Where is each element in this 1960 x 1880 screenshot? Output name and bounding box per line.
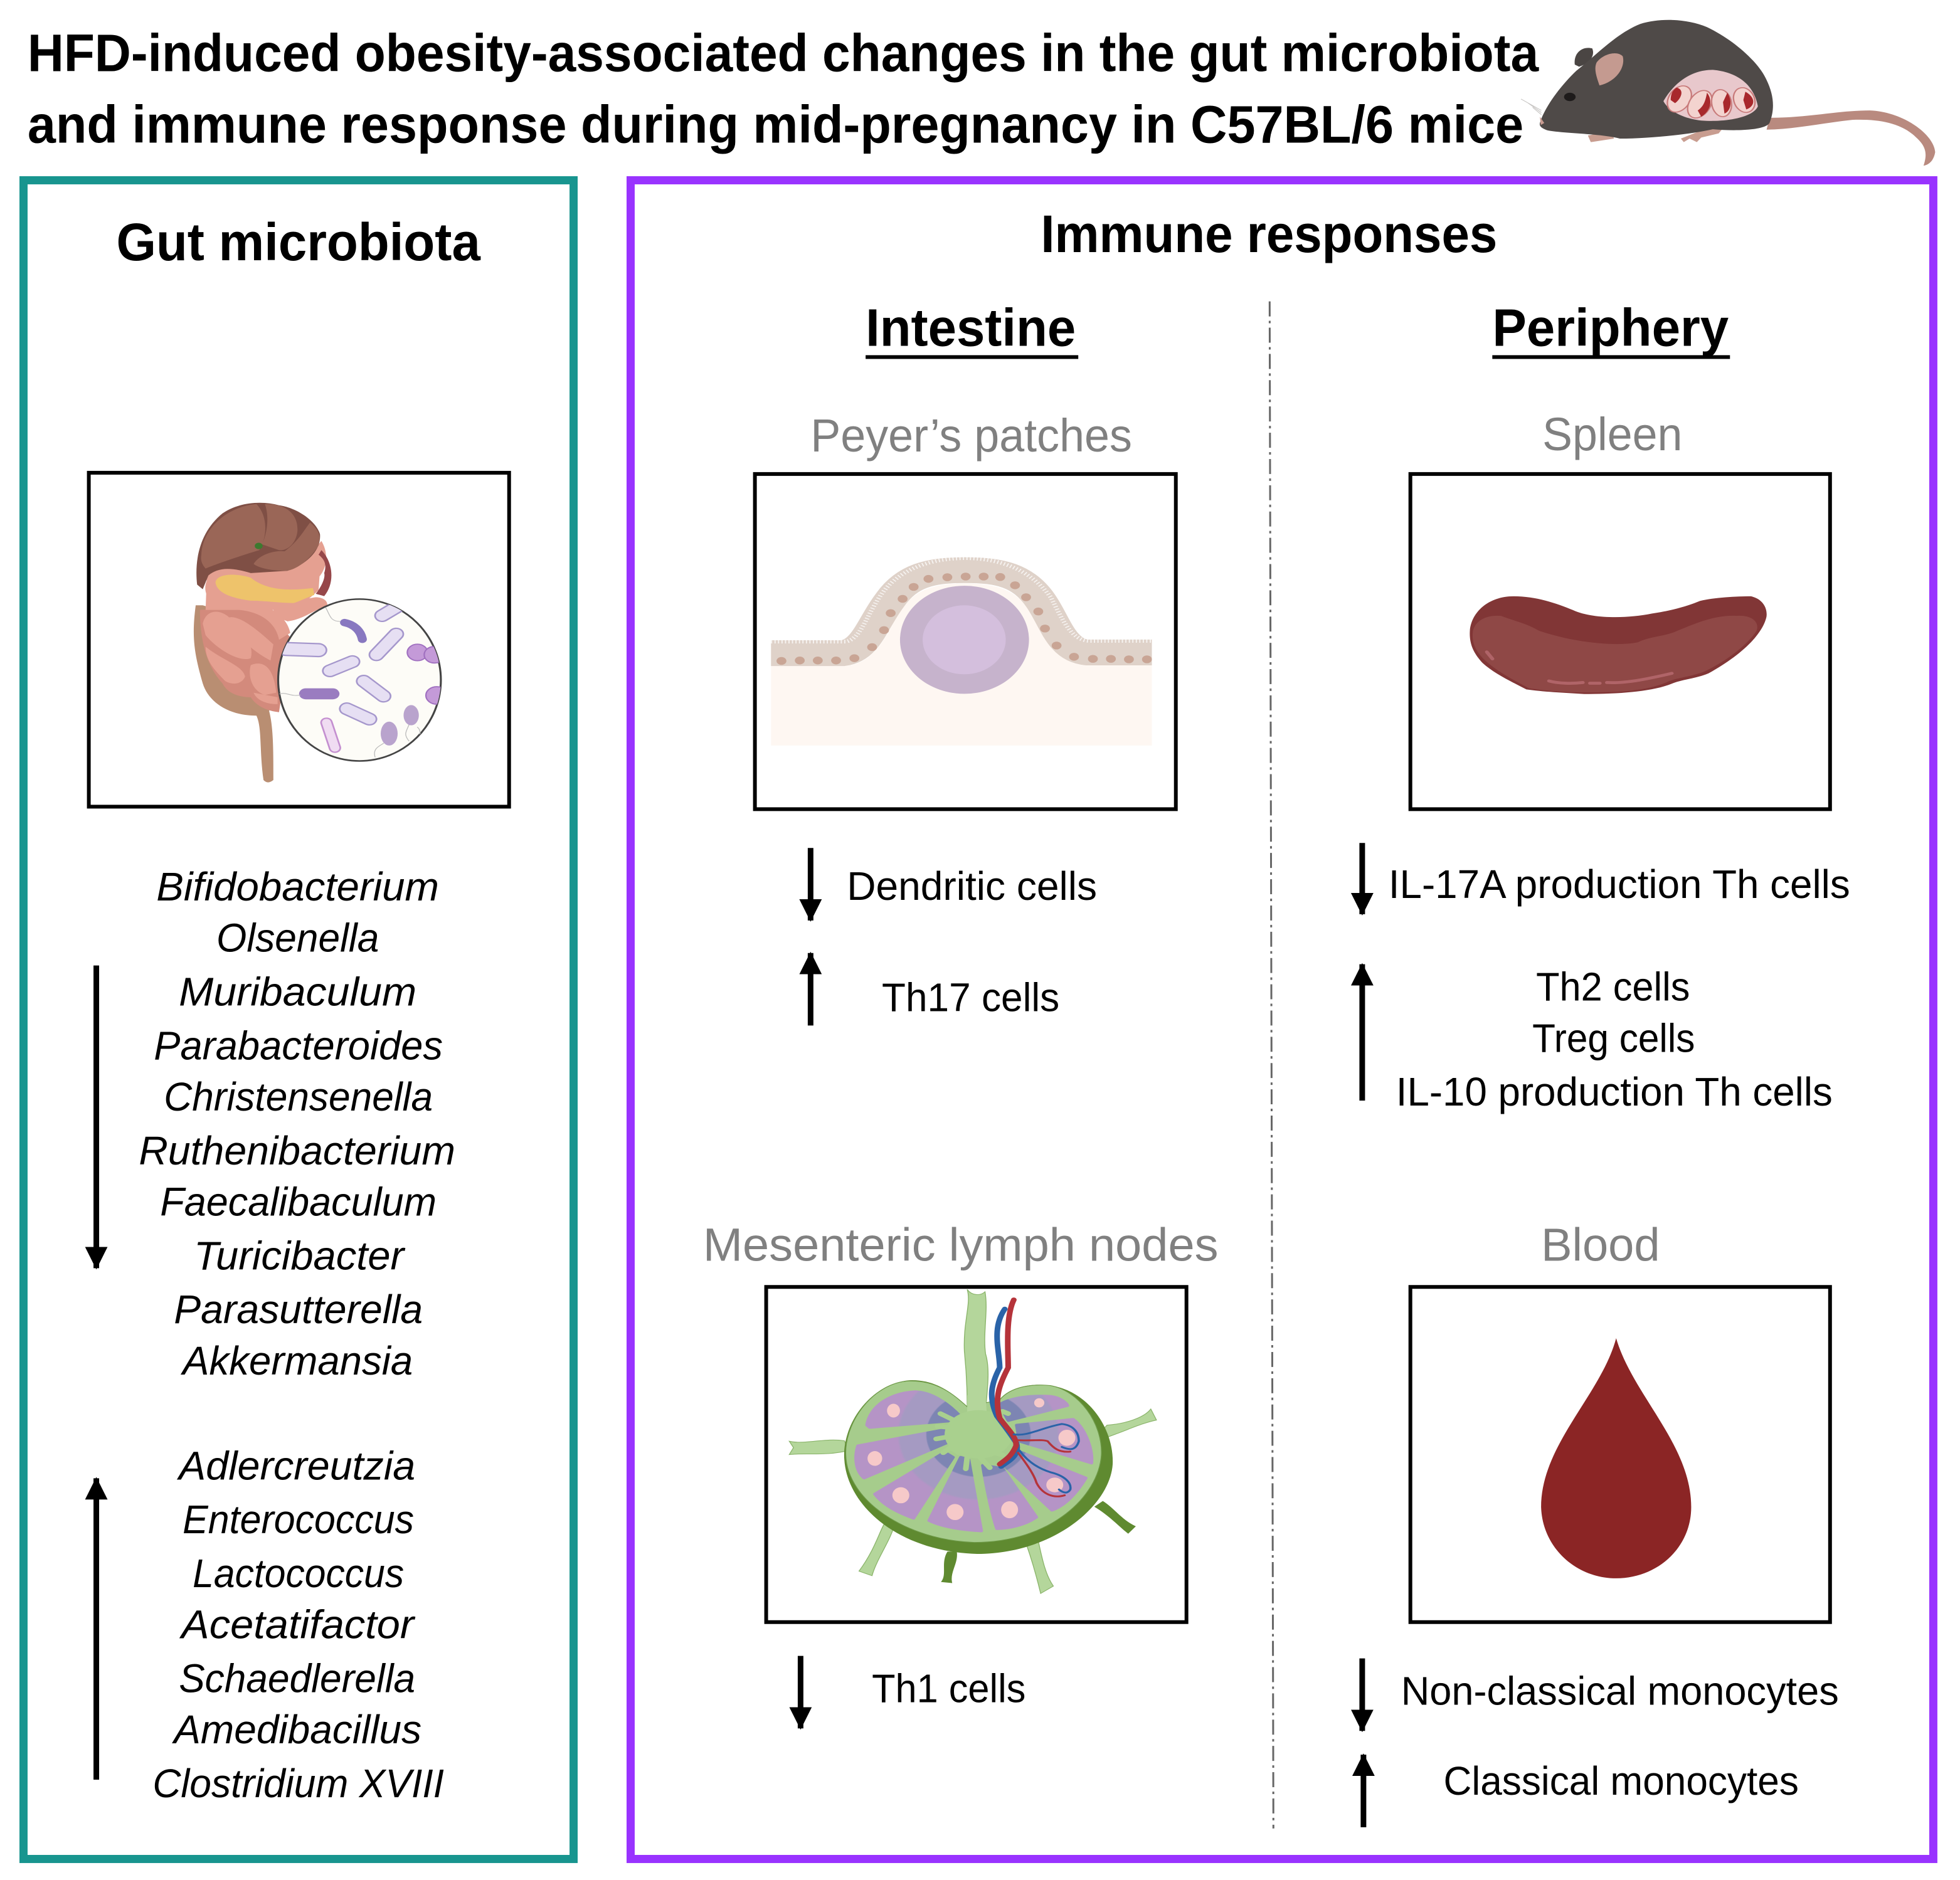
heading: gut microbiota: Gut microbiota bbox=[116, 212, 481, 272]
heading: periphery: Periphery bbox=[1492, 297, 1729, 357]
list: increased genera: Lactococcus bbox=[193, 1551, 404, 1596]
label: dendritic cells: Dendritic cells bbox=[847, 863, 1097, 909]
title bbox=[28, 23, 1539, 154]
arrow: up, Th17 cells bbox=[808, 953, 813, 1025]
icon: blood drop bbox=[1541, 1338, 1691, 1578]
panel: immune responses bbox=[630, 180, 1933, 1859]
list: decreased genera bbox=[139, 864, 455, 1383]
icon: spleen bbox=[1470, 596, 1767, 694]
list: increased genera: Enterococcus bbox=[183, 1497, 414, 1542]
list: increased genera: Clostridium XVIII bbox=[152, 1761, 444, 1806]
label: classical monocytes: Classical monocytes bbox=[1444, 1758, 1799, 1803]
list: decreased genera: Olsenella bbox=[216, 916, 379, 961]
illustration frame: lymph node bbox=[766, 1287, 1187, 1622]
arrow: down, IL-17A bbox=[1359, 843, 1365, 914]
label: increased periphery cells: Th2 cells bbox=[1536, 964, 1690, 1010]
arrow: up, classical monocytes bbox=[1360, 1755, 1366, 1827]
title: HFD-induced obesity-associated changes in the gut microbiota bbox=[28, 23, 1539, 83]
subheading: Peyer's patches: Peyer’s patches bbox=[810, 409, 1132, 462]
arrow: down, non-classical monocytes bbox=[1359, 1659, 1365, 1731]
illustration frame: spleen bbox=[1411, 474, 1830, 809]
list: decreased genera: Parabacteroides bbox=[154, 1023, 443, 1068]
icon: lymph node bbox=[789, 1289, 1157, 1593]
arrow: down bbox=[93, 966, 99, 1268]
title: and immune response during mid-pregnancy in C57BL/6 mice bbox=[28, 94, 1523, 154]
list: decreased genera: Parasutterella bbox=[174, 1287, 423, 1332]
list: decreased genera: Ruthenibacterium bbox=[139, 1128, 455, 1173]
label: Th1 cells: Th1 cells bbox=[872, 1666, 1025, 1711]
label: increased periphery cells: Treg cells bbox=[1532, 1015, 1695, 1060]
label: non-classical monocytes: Non-classical monocytes bbox=[1401, 1668, 1839, 1713]
list: decreased genera: Turicibacter bbox=[194, 1233, 406, 1278]
subheading: blood: Blood bbox=[1541, 1218, 1660, 1270]
icon: pregnant mouse bbox=[1521, 20, 1935, 166]
subheading: spleen: Spleen bbox=[1542, 408, 1682, 460]
list: increased genera: Adlercreutzia bbox=[176, 1443, 415, 1488]
list: decreased genera: Faecalibaculum bbox=[160, 1180, 437, 1225]
label: increased periphery cells: IL-10 production Th cells bbox=[1396, 1069, 1833, 1114]
list: increased genera: Acetatifactor bbox=[179, 1602, 416, 1647]
subheading: mesenteric lymph nodes: Mesenteric lymph nodes bbox=[703, 1218, 1219, 1270]
list: decreased genera: Akkermansia bbox=[180, 1338, 413, 1383]
list: increased genera: Schaedlerella bbox=[179, 1656, 415, 1701]
arrow: down, Th1 cells bbox=[798, 1656, 803, 1728]
list: increased genera bbox=[152, 1443, 444, 1806]
list: decreased genera: Muribaculum bbox=[179, 969, 416, 1014]
label: IL-17A production Th cells: IL-17A production Th cells bbox=[1389, 862, 1850, 907]
illustration frame: gut bbox=[89, 473, 509, 806]
panel: gut microbiota bbox=[23, 180, 574, 1859]
heading: immune responses: Immune responses bbox=[1041, 204, 1497, 263]
illustration frame: Peyer's patches bbox=[755, 474, 1176, 809]
list: decreased genera: Christensenella bbox=[164, 1074, 433, 1119]
illustration frame: blood bbox=[1411, 1287, 1830, 1622]
heading: intestine: Intestine bbox=[866, 297, 1076, 357]
icon: digestive tract with bacteria bbox=[194, 503, 447, 783]
label: Th17 cells: Th17 cells bbox=[882, 974, 1059, 1020]
list: increased genera: Amedibacillus bbox=[171, 1707, 421, 1752]
arrow: up bbox=[93, 1478, 99, 1780]
arrow: up, Th2 Treg IL-10 bbox=[1359, 964, 1365, 1101]
arrow: down, dendritic cells bbox=[808, 848, 813, 921]
icon: Peyer's patch bbox=[771, 558, 1152, 746]
list: decreased genera: Bifidobacterium bbox=[156, 864, 439, 909]
label: increased periphery cells bbox=[1396, 964, 1833, 1114]
